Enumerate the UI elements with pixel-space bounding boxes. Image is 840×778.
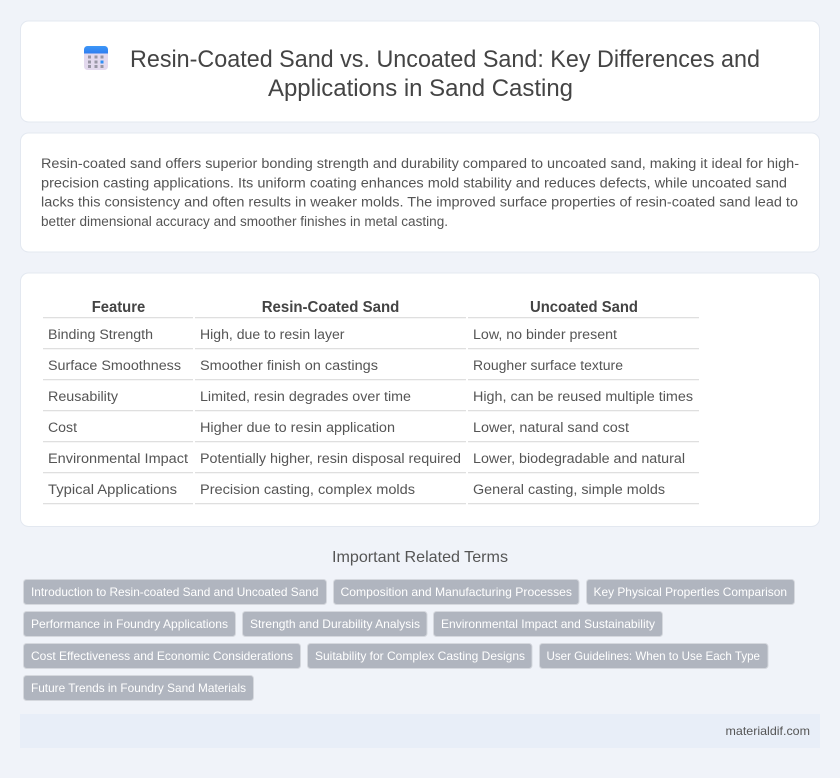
tag bbox=[334, 580, 579, 604]
footer: materialdif.com bbox=[726, 724, 810, 738]
tag bbox=[586, 580, 794, 604]
row: surface smoothness: Rougher surface texture bbox=[473, 358, 623, 374]
table header: Uncoated Sand bbox=[530, 299, 638, 316]
tag: User Guidelines: When to Use Each Type bbox=[546, 649, 760, 663]
footer bbox=[20, 714, 820, 748]
tag: Future Trends in Foundry Sand Materials bbox=[31, 681, 246, 695]
text block: summary: lacks this consistency and often results in weaker molds. The improved surface properties of resin-coated sand lead to bbox=[41, 195, 798, 211]
row: reusability: High, can be reused multiple times bbox=[473, 389, 693, 405]
row: surface smoothness: Smoother finish on castings bbox=[200, 358, 378, 374]
table header bbox=[92, 299, 638, 316]
panel: summary paragraph bbox=[20, 133, 820, 252]
title bbox=[130, 46, 760, 102]
row: environmental impact: Potentially higher, resin disposal required bbox=[200, 451, 461, 467]
tag: Cost Effectiveness and Economic Considerations bbox=[31, 649, 293, 663]
tag: Performance in Foundry Applications bbox=[31, 617, 228, 631]
row: reusability bbox=[48, 389, 693, 405]
heading: related terms: Important Related Terms bbox=[332, 549, 508, 566]
related term tags bbox=[24, 580, 794, 700]
row: typical applications: General casting, simple molds bbox=[473, 482, 665, 498]
tag bbox=[308, 644, 532, 668]
row: typical applications: Typical Applications bbox=[48, 482, 177, 498]
row: reusability: Limited, resin degrades over time bbox=[200, 389, 411, 405]
row: binding strength: Binding Strength bbox=[48, 327, 153, 343]
row: cost: Cost bbox=[48, 420, 77, 436]
row: cost bbox=[48, 420, 629, 436]
tag: Introduction to Resin-coated Sand and Uncoated Sand bbox=[31, 585, 318, 599]
title: Applications in Sand Casting bbox=[268, 75, 573, 102]
row: reusability: Reusability bbox=[48, 389, 119, 405]
row: cost: Higher due to resin application bbox=[200, 420, 395, 436]
tag bbox=[434, 612, 662, 636]
row: surface smoothness: Surface Smoothness bbox=[48, 358, 181, 374]
tag: Suitability for Complex Casting Designs bbox=[315, 649, 525, 663]
tag bbox=[540, 644, 768, 668]
tag bbox=[24, 612, 236, 636]
row: environmental impact bbox=[48, 451, 685, 467]
row: typical applications bbox=[48, 482, 665, 498]
tag: Key Physical Properties Comparison bbox=[594, 585, 787, 599]
row: binding strength: Low, no binder present bbox=[473, 327, 617, 343]
text block: summary: Resin-coated sand offers superior bonding strength and durability compared to uncoated sand, making it ideal for high- bbox=[41, 156, 799, 172]
row: typical applications: Precision casting, complex molds bbox=[200, 482, 415, 498]
row: environmental impact: Environmental Impact bbox=[48, 451, 188, 467]
table header: Resin-Coated Sand bbox=[262, 299, 399, 316]
text block: summary bbox=[41, 156, 799, 230]
text block: summary: better dimensional accuracy and smoother finishes in metal casting. bbox=[41, 214, 448, 230]
row: binding strength bbox=[48, 327, 617, 343]
icon: calendar bbox=[84, 46, 108, 70]
tag bbox=[24, 644, 300, 668]
row: surface smoothness bbox=[48, 358, 623, 374]
tag bbox=[242, 612, 427, 636]
row: environmental impact: Lower, biodegradable and natural bbox=[473, 451, 685, 467]
panel: header bbox=[20, 21, 820, 122]
row: binding strength: High, due to resin layer bbox=[200, 327, 345, 343]
title: Resin-Coated Sand vs. Uncoated Sand: Key Differences and bbox=[130, 46, 760, 73]
table row rules bbox=[43, 317, 699, 504]
tag: Environmental Impact and Sustainability bbox=[441, 617, 655, 631]
tag: Strength and Durability Analysis bbox=[250, 617, 420, 631]
tag bbox=[24, 580, 326, 604]
panel: comparison table bbox=[20, 273, 820, 526]
row: cost: Lower, natural sand cost bbox=[473, 420, 629, 436]
tag bbox=[24, 676, 254, 700]
tag: Composition and Manufacturing Processes bbox=[340, 585, 572, 599]
text block: summary: precision casting applications. Its uniform coating enhances mold stability and reduces defects, while uncoated sand bbox=[41, 175, 787, 191]
table header: Feature bbox=[92, 299, 145, 316]
